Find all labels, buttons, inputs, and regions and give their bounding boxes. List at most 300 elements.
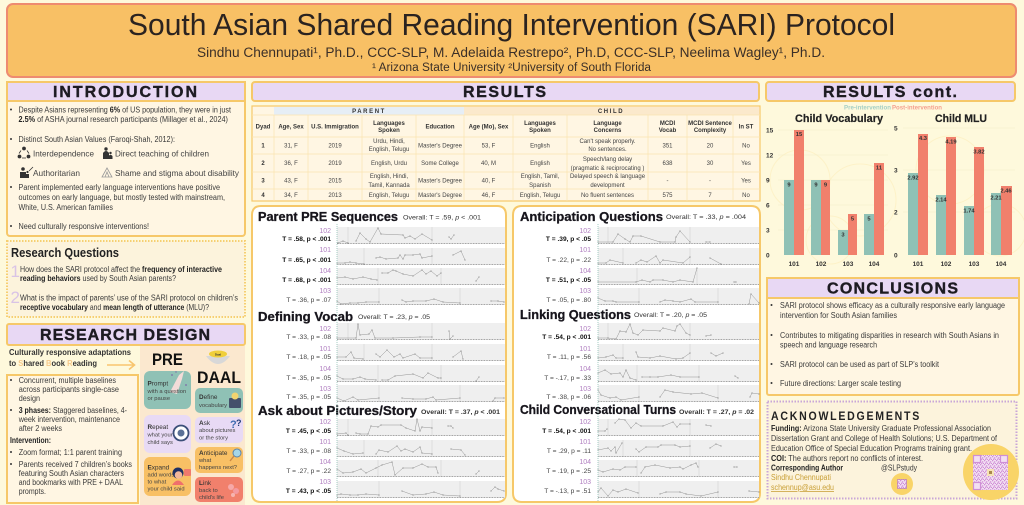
question 1 <box>10 262 223 283</box>
icon: small QR badge <box>891 473 913 495</box>
chart: PRE 102: T = .58, p < .001 <box>282 236 331 243</box>
chart: vocab 101: 101 <box>319 346 331 353</box>
x axis <box>789 261 880 268</box>
table row 4: 46, F <box>482 193 496 199</box>
chart: vocab 103 <box>286 385 505 402</box>
chart: anticipation 101: T = .22, p = .22 <box>546 257 591 264</box>
chart: ask 103: 103 <box>319 479 331 486</box>
card: repeat <box>144 415 191 453</box>
chart: turns 102: T = .54, p < .001 <box>542 428 591 435</box>
x axis: 102 <box>816 261 827 268</box>
table row 3: Yes <box>741 178 751 184</box>
adaptations label <box>9 348 132 368</box>
introduction text: Distinct South Asian Values (Faroqi-Shah, 2012): <box>18 135 175 144</box>
conclusions text: SARI protocol shows efficacy as a culturally responsive early language <box>780 301 1005 310</box>
chart: PRE 103 <box>286 288 505 305</box>
table row 2: Yes <box>741 161 751 167</box>
card: anticipate <box>195 447 243 473</box>
chart: linking 104: 104 <box>579 366 591 373</box>
heading: results continued: RESULTS cont. <box>823 84 957 101</box>
table row 2: Some College <box>421 161 460 167</box>
heading: ask about pictures <box>254 403 504 418</box>
conclusions text: Future directions: Larger scale testing <box>780 379 901 388</box>
panel: study design text: 3 phases: Staggered baselines, 4- <box>19 406 127 415</box>
bars <box>907 134 1012 255</box>
panel: research questions <box>7 241 245 317</box>
bars: 5 <box>867 216 871 222</box>
heading: linking questions: Overall: T = .20, p = .05 <box>634 312 707 319</box>
chart: linking 102: T = .54, p < .001 <box>542 334 591 341</box>
chart: PRE 101: T = .65, p < .001 <box>282 257 331 264</box>
panel: study design text: Parents received 7 children’s books <box>19 460 132 469</box>
bars: 9 <box>814 182 818 188</box>
chart: PRE 102: 102 <box>319 228 331 235</box>
chart: turns 103: T = -.13, p = .51 <box>544 488 591 495</box>
x axis: 104 <box>996 261 1007 268</box>
chart: turns 102: 102 <box>579 419 591 426</box>
card: define: vocabulary <box>199 403 227 409</box>
bars: 1.74 <box>963 208 975 214</box>
value: shame and stigma: Shame and stigma about disability <box>115 168 240 178</box>
corresponding author <box>771 464 843 492</box>
chart: turns 104 <box>546 459 759 477</box>
y axis: 12 <box>766 152 774 160</box>
table row 2: (pragmatic & reciprocating ) <box>571 166 644 172</box>
table row 3: Delayed speech & language <box>570 174 646 180</box>
icon: authoritarian <box>20 167 33 178</box>
x axis: 103 <box>843 261 854 268</box>
heading: research design <box>7 324 245 345</box>
introduction text: 2.5% of ASHA journal research participants (Millager et al., 2024) <box>18 115 228 124</box>
bars: 5 <box>851 216 855 222</box>
card: ask: or the story <box>199 436 228 442</box>
question 1: reading behaviors used by South Asian parents? <box>20 274 177 283</box>
table row 3: development <box>590 183 625 189</box>
chart: ask 102: 102 <box>319 419 331 426</box>
chart: child MLU: Child MLU <box>935 113 987 125</box>
introduction text <box>10 106 232 144</box>
chart: vocab 104 <box>286 365 505 382</box>
y axis: 3 <box>894 168 898 174</box>
chart: ask 101: T = .33, p = .08 <box>286 448 331 455</box>
table row 4: No fluent sentences <box>581 193 634 199</box>
bars: 9 <box>787 182 791 188</box>
panel: study design text: and bookmarks with PRE + DAAL <box>19 478 124 487</box>
table row 4: 2013 <box>328 193 342 199</box>
card: ask: Ask <box>199 420 211 427</box>
table header row: Vocab <box>659 128 677 134</box>
chart: vocab 101: T = .18, p = .05 <box>286 354 331 361</box>
table row 4: 7 <box>708 193 712 199</box>
panel: conclusions <box>767 278 1019 395</box>
bars: 4.3 <box>919 136 928 142</box>
chart: turns 103: 103 <box>579 479 591 486</box>
card: ask <box>195 417 243 443</box>
table row 3: Tamil, Kannada <box>368 183 410 189</box>
bars: 2.14 <box>935 198 947 204</box>
bars: 3 <box>841 232 845 238</box>
conclusions text: SARI protocol can be used as part of SLP’s toolkit <box>780 360 940 369</box>
heading: parent PRE sequences: Parent PRE Sequences <box>258 209 398 224</box>
heading: anticipation questions: Overall: T = .33, p = .004 <box>666 214 746 221</box>
funding text: Education Office of Special Education Programs training grant. <box>771 444 972 453</box>
table row 3: 3 <box>261 178 265 184</box>
chart: ask 104 <box>286 459 505 477</box>
panel: study design text: Zoom format; 1:1 parent training <box>19 448 122 457</box>
panel: parent behaviours charts left <box>252 206 506 502</box>
table header row: Concerns <box>594 128 622 134</box>
bars: 15 <box>796 132 803 138</box>
table row 4: No <box>742 193 750 199</box>
chart: linking 102: 102 <box>579 326 591 333</box>
affiliations: ¹ Arizona State University ²University of South Florida <box>372 62 652 74</box>
table row 3 <box>261 174 751 189</box>
table header row <box>256 121 754 134</box>
table header row: MCDI Sentence <box>688 121 732 127</box>
legend: Pre-intervention <box>844 104 891 112</box>
card: anticipate: what <box>198 458 212 464</box>
card: define <box>195 388 243 413</box>
funding text: Dissertation Grant and College of Health Solutions; U.S. Department of <box>771 434 998 443</box>
x axis: 103 <box>969 261 980 268</box>
table: participants: PARENT <box>352 109 386 115</box>
chart: turns 104: T = .19, p = .25 <box>546 468 591 475</box>
card: link: back to <box>199 488 218 494</box>
table row 1: Master's Degree <box>418 144 463 150</box>
y axis: 3 <box>766 228 770 234</box>
introduction text continued: Parent implemented early language interventions have positive <box>18 183 220 192</box>
legend <box>844 104 942 112</box>
card: expand: your child said <box>148 486 185 492</box>
chart: anticipation 104 <box>546 268 759 285</box>
chart: vocab 102 <box>286 323 505 341</box>
chart: ask 101: 101 <box>319 439 331 446</box>
conclusions text: Contributes to mitigating disparities in research with South Asians in <box>780 331 999 340</box>
panel: study design text: week intervention, maintenance <box>18 415 120 424</box>
chart: vocab 101 <box>286 344 505 361</box>
heading: parent PRE sequences <box>258 209 481 224</box>
table row 1: 53, F <box>482 144 496 150</box>
chart: ask 103 <box>286 479 505 498</box>
table row 3: Master's Degree <box>418 178 463 184</box>
table row 1 <box>261 139 750 153</box>
table row 3: 2015 <box>328 178 342 184</box>
y axis: 15 <box>766 128 774 134</box>
card: expand <box>144 457 191 496</box>
chart: ask 104: 104 <box>319 459 331 466</box>
card: anticipate: happens next? <box>199 465 238 471</box>
chart: vocab 103: 103 <box>319 386 331 393</box>
heading: introduction: INTRODUCTION <box>53 84 197 101</box>
panel: study design text: design <box>19 394 40 403</box>
question 2: What is the impact of parents’ use of the SARI protocol on children’s <box>20 294 238 302</box>
heading: defining vocab: Overall: T = .23, p = .05 <box>358 314 430 321</box>
adaptations label: Culturally responsive adaptations <box>9 348 132 357</box>
panel: PRE and DAAL prompts <box>140 346 245 505</box>
table row 2: English <box>530 161 550 167</box>
panel: study design text: featuring South Asian characters <box>19 469 124 478</box>
title: South Asian Shared Reading Intervention (SARI) Protocol <box>128 7 895 42</box>
chart: PRE 102 <box>282 227 505 244</box>
chart: PRE 104: T = .68, p < .001 <box>282 277 331 284</box>
chart: PRE 103: T = .36, p = .07 <box>286 297 331 304</box>
question 2: receptive vocabulary and mean length of utterance (MLU)? <box>20 303 210 312</box>
heading: ask about pictures: Overall: T = .37, p < .001 <box>421 409 500 416</box>
table row 1: Can't speak properly. <box>579 139 636 145</box>
chart: turns 101: 101 <box>579 439 591 446</box>
panel: study design text <box>7 375 138 503</box>
icon: bowl <box>206 350 230 364</box>
conclusions text: speech and language research <box>780 340 877 350</box>
x axis: 104 <box>869 261 880 268</box>
table header row: In ST <box>739 124 754 130</box>
table header row: Dyad <box>256 124 271 130</box>
y axis: 5 <box>894 126 898 132</box>
chart: linking 103: T = .38, p = .06 <box>546 394 591 401</box>
introduction text continued: Need culturally responsive interventions! <box>18 222 149 231</box>
chart: ask 102 <box>286 419 505 436</box>
legend: Post-intervention <box>892 104 942 112</box>
axis line <box>336 224 338 502</box>
value: authoritarian: Authoritarian <box>33 168 80 178</box>
chart: linking 101: T = .11, p = .56 <box>547 354 591 361</box>
table header row: Language <box>593 121 622 127</box>
table row 1: English <box>530 144 550 150</box>
chart: turns 101: T = .29, p = .11 <box>547 448 591 455</box>
table row 3: English, Tamil, <box>521 174 560 180</box>
bars: 4.19 <box>945 140 957 146</box>
chart: turns 103 <box>544 479 759 498</box>
table row 2: 638 <box>662 161 673 167</box>
table header row: Age, Sex <box>278 124 304 130</box>
table row 2: 30 <box>707 161 714 167</box>
table header row: Spoken <box>529 128 551 134</box>
card: ask: ? <box>230 419 237 431</box>
table row 2: 40, M <box>481 161 496 167</box>
adaptations label: to Shared Book Reading <box>9 359 97 368</box>
bars <box>784 130 884 255</box>
icon: direct teaching <box>103 147 112 159</box>
question 1: How does the SARI protocol affect the frequency of interactive <box>20 265 223 274</box>
table row 4: Master's Degree <box>418 193 463 199</box>
question 2: 2 <box>10 288 20 307</box>
funding text <box>771 424 998 463</box>
chart: PRE 104 <box>282 268 505 285</box>
chart: anticipation 104: T = .51, p < .05 <box>546 277 591 284</box>
table row 1: 1 <box>261 144 265 150</box>
heading: research design: RESEARCH DESIGN <box>40 327 210 344</box>
bars: 9 <box>824 182 828 188</box>
table row 3: 40, F <box>482 178 496 184</box>
chart: anticipation 103: T = .05, p = .80 <box>546 297 591 304</box>
heading: defining vocab: Defining Vocab <box>258 309 353 324</box>
axis line <box>597 224 599 502</box>
chart: anticipation 101: 101 <box>579 247 591 254</box>
table header row: U.S. Immigration <box>311 124 359 130</box>
card: expand: Expand <box>148 464 170 472</box>
icon: shame and stigma <box>102 168 112 177</box>
table header row: Age (Mo), Sex <box>469 124 509 130</box>
card: link: child's life <box>199 495 224 501</box>
table row 2: English, Urdu <box>371 161 407 167</box>
funding text: COI: The authors report no conflicts of interest. <box>771 454 923 463</box>
heading: conclusions: CONCLUSIONS <box>827 280 958 298</box>
header banner <box>7 4 1016 77</box>
chart: PRE 101 <box>282 247 505 265</box>
heading: results <box>252 82 759 101</box>
chart: anticipation 103: 103 <box>579 288 591 295</box>
chart: turns 102 <box>542 419 759 436</box>
card: prompt: Prompt <box>148 380 168 388</box>
chart: anticipation 103 <box>546 288 759 305</box>
funding text: Funding: Arizona State University Graduate Professional Association <box>771 424 991 433</box>
x axis: 101 <box>789 261 800 268</box>
table row 4 <box>261 193 750 199</box>
panel: questions and turns charts right <box>513 206 760 502</box>
table row 4: 34, F <box>284 193 298 199</box>
heading: ask about pictures: Ask about Pictures/Story <box>258 403 418 418</box>
table row 1: No <box>742 144 750 150</box>
chart: linking 104: T = -.17, p = .33 <box>544 375 591 382</box>
table row 4: English, Telugu <box>520 193 560 199</box>
table row 4: English, Telugu <box>369 193 409 199</box>
heading: anticipation questions <box>520 209 746 224</box>
heading: acknowledgements: ACKNOWLEDGEMENTS <box>771 409 921 423</box>
table row 4: 4 <box>261 193 265 199</box>
card: repeat: Repeat <box>148 424 168 431</box>
table row 1: No sentences. <box>588 147 627 153</box>
chart: linking 101 <box>547 344 759 361</box>
card: repeat: child says <box>148 440 173 446</box>
table row 1: 31, F <box>284 144 298 150</box>
chart: child MLU <box>894 113 1015 268</box>
icon: interdependence <box>18 147 30 158</box>
introduction text: Despite Asians representing 6% of US population, they were in just <box>18 106 232 114</box>
card: ask: about pictures <box>199 428 236 434</box>
bars: 11 <box>876 166 883 172</box>
table header row: Languages <box>524 121 556 127</box>
card: link: Link <box>199 480 212 487</box>
card: prompt <box>144 371 191 409</box>
chart: vocab 104: 104 <box>319 366 331 373</box>
icon: bowl: Daal <box>215 352 221 356</box>
chart: vocab 103: T = .35, p = .05 <box>286 394 331 401</box>
heading: introduction <box>7 82 245 101</box>
heading: results continued <box>766 82 1015 101</box>
card: prompt: or pause <box>148 396 170 402</box>
table row 2: 2 <box>261 161 265 167</box>
table row 1: English, Telugu <box>369 147 409 153</box>
chart: ask 101 <box>286 439 505 457</box>
introduction text continued <box>10 183 225 231</box>
chart: anticipation 102: 102 <box>579 228 591 235</box>
card: ask: ? <box>236 418 242 428</box>
chart: PRE 104: 104 <box>319 268 331 275</box>
table row 3: 43, F <box>284 178 298 184</box>
table: participants <box>252 106 760 201</box>
chart: vocab 104: T = .35, p = .05 <box>286 375 331 382</box>
table row 2: 2019 <box>328 161 342 167</box>
chart: child vocabulary: Child Vocabulary <box>795 113 884 125</box>
introduction text continued: White, U.S. American families <box>18 203 113 212</box>
heading: defining vocab <box>254 307 504 324</box>
table header row: Education <box>425 124 455 130</box>
bars: 2.21 <box>990 196 1002 202</box>
heading: linking questions <box>515 307 759 322</box>
y axis: 9 <box>766 178 770 184</box>
heading: linking questions: Linking Questions <box>520 307 631 322</box>
table row 3: English, Hindi, <box>370 174 409 180</box>
table row 1: 20 <box>707 144 714 150</box>
chart: ask 102: T = .45, p < .05 <box>286 428 331 435</box>
panel: study design text: across participants single-case <box>19 385 119 394</box>
chart: ask 104: T = .27, p = .22 <box>286 468 331 475</box>
panel: study design text: prompts. <box>19 487 46 496</box>
table row 2 <box>261 157 751 172</box>
chart: vocab 102: 102 <box>319 326 331 333</box>
chart: linking 103 <box>546 385 759 402</box>
value: direct teaching: Direct teaching of children <box>115 148 209 158</box>
heading: parent PRE sequences: Overall: T = .59, p < .001 <box>403 214 481 222</box>
card: anticipate: Anticipate <box>199 450 228 457</box>
chart: anticipation 101 <box>546 247 759 265</box>
chart: PRE 101: 101 <box>319 247 331 254</box>
heading: conclusions <box>767 278 1019 298</box>
corresponding author: Corresponding Author <box>771 464 843 472</box>
y axis <box>766 128 774 260</box>
conclusions text <box>770 301 1005 388</box>
chart: PRE 103: 103 <box>319 288 331 295</box>
table row 1: 351 <box>662 144 673 150</box>
icon: QR code badge <box>963 444 1019 500</box>
table row 4: 575 <box>662 193 673 199</box>
table row 1: 2019 <box>328 144 342 150</box>
bars: 3.82 <box>973 150 985 156</box>
authors: Sindhu Chennupati¹, Ph.D., CCC-SLP, M. Adelaida Restrepo², Ph.D, CCC-SLP, Neelima Wagley¹, Ph.D. <box>197 45 825 60</box>
heading: child conversational turns: Child Conversational Turns <box>520 402 676 417</box>
bars: 2.46 <box>1000 188 1012 194</box>
card: repeat: what your <box>146 432 173 438</box>
chart: linking 104 <box>544 365 759 382</box>
heading: child conversational turns <box>515 402 759 418</box>
table header row: Spoken <box>378 128 400 134</box>
table header row: MCDI <box>660 121 675 127</box>
value: interdependence: Interdependence <box>33 148 94 158</box>
card: expand: add words <box>148 472 174 478</box>
corresponding author: Sindhu Chennupati <box>771 473 831 482</box>
y axis: 6 <box>766 202 770 210</box>
panel: study design text: Concurrent, multiple baselines <box>19 376 116 385</box>
panel: acknowledgements <box>768 402 1019 500</box>
table row 3: - <box>709 178 711 184</box>
heading: anticipation questions: Anticipation Questions <box>520 209 663 224</box>
chart: turns 101 <box>547 439 759 457</box>
arrow <box>107 360 134 370</box>
chart: anticipation 104: 104 <box>579 268 591 275</box>
table row 2: Speech/lang delay <box>583 157 632 163</box>
heading: research questions: Research Questions <box>11 245 119 260</box>
table header row: Complexity <box>694 128 727 134</box>
card: prompt: with a question <box>146 389 186 395</box>
y axis: 0 <box>766 252 770 260</box>
table row 2: 36, F <box>284 161 298 167</box>
question 1: 1 <box>10 262 20 281</box>
PRE heading: PRE <box>152 350 183 369</box>
x axis: 102 <box>941 261 952 268</box>
card: link <box>195 477 243 502</box>
table row 3: Spanish <box>529 183 551 189</box>
y axis <box>894 126 898 260</box>
